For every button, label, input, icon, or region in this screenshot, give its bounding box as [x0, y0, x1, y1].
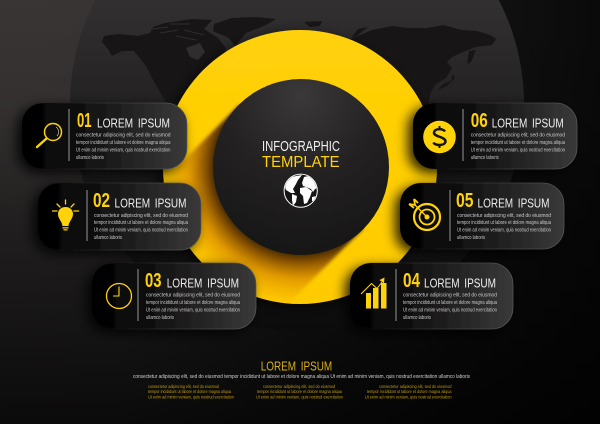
panel: 05	[400, 183, 564, 249]
panel: 05: ullamco laboris	[457, 235, 485, 241]
world map silhouette	[102, 17, 496, 115]
panel: 04: 04	[403, 270, 421, 292]
panel: 01	[22, 103, 187, 169]
panel: 02: Ut enim ad minim veniam, quis nostrud exercitation	[94, 227, 188, 233]
panel: 04: tempor incididunt ut labore et dolore magna aliqua	[403, 300, 497, 306]
panel: 01: consectetur adipiscing elit, sed do eiusmod	[76, 133, 171, 139]
panel: 06: Ut enim ad minim veniam, quis nostrud exercitation	[471, 147, 565, 153]
footer summary line: consectetur adipiscing elit, sed do eiusmod tempor incididunt ut labore et dolore magna aliqua Ut enim ad minim veniam, quis nostrud exercitation ullamco laboris	[133, 374, 470, 380]
panel: 05: consectetur adipiscing elit, sed do eiusmod	[457, 213, 551, 219]
icon: clock	[106, 284, 132, 308]
icon: dollar coin	[423, 121, 456, 153]
footer column 2	[256, 384, 343, 400]
panel: 04: LOREM IPSUM	[424, 275, 496, 290]
panel: 06: consectetur adipiscing elit, sed do eiusmod	[471, 133, 565, 139]
panel: 01: tempor incididunt ut labore et dolore magna aliqua	[76, 140, 171, 146]
footer column 3: consectetur adipiscing elit, sed do eiusmod	[379, 384, 452, 389]
panel: 05: tempor incididunt ut labore et dolore magna aliqua	[457, 220, 551, 226]
icon: magnifier	[37, 124, 62, 147]
panel: 05: 05	[456, 190, 474, 212]
footer column 2: Ut enim ad minim veniam, quis nostrud exercitation	[256, 394, 343, 400]
panel: 04: consectetur adipiscing elit, sed do eiusmod	[403, 293, 497, 299]
footer column 1: consectetur adipiscing elit, sed do eiusmod	[148, 384, 219, 389]
panel: 04	[350, 263, 513, 329]
panel: 01: LOREM IPSUM	[97, 115, 170, 130]
footer column 3: Ut enim ad minim veniam, quis nostrud exercitation	[365, 394, 452, 400]
panel: 02: ullamco laboris	[94, 235, 122, 241]
panel: 01: ullamco laboris	[76, 155, 104, 161]
panel: 01: Ut enim ad minim veniam, quis nostrud exercitation	[76, 147, 171, 153]
footer column 1: Ut enim ad minim veniam, quis nostrud exercitation	[148, 394, 234, 400]
icon: white globe	[284, 174, 320, 207]
panel: 06: 06	[471, 110, 488, 132]
panel: 02	[38, 183, 201, 250]
center title: INFOGRAPHIC	[262, 139, 340, 155]
center title	[262, 139, 340, 171]
panel: 03	[92, 263, 256, 329]
panel: 02: consectetur adipiscing elit, sed do eiusmod	[94, 213, 188, 219]
center title: TEMPLATE	[262, 154, 340, 171]
footer column 2: consectetur adipiscing elit, sed do eiusmod	[263, 384, 335, 389]
icon: target with arrow	[409, 199, 440, 230]
panel: 06: tempor incididunt ut labore et dolore magna aliqua	[471, 140, 565, 146]
panel: 02: tempor incididunt ut labore et dolore magna aliqua	[94, 220, 188, 226]
center disc	[213, 79, 389, 255]
world globe backdrop	[70, 0, 524, 331]
long diagonal shadow on ring	[169, 103, 365, 303]
panel: 03: ullamco laboris	[146, 315, 174, 321]
panel: 05: Ut enim ad minim veniam, quis nostrud exercitation	[457, 227, 551, 233]
panel: 03: 03	[145, 270, 162, 292]
icon: light bulb	[52, 200, 78, 231]
footer column 1: tempor incididunt ut labore et dolore magna aliqua	[148, 389, 231, 394]
icon: bar chart with arrow	[361, 278, 386, 308]
footer column 1	[148, 384, 234, 400]
panel: 06	[413, 103, 577, 169]
footer heading: LOREM IPSUM	[261, 358, 332, 374]
panel: 02: 02	[93, 190, 110, 212]
panel: 05: LOREM IPSUM	[478, 196, 550, 211]
footer column 2: tempor incididunt ut labore et dolore magna aliqua	[257, 389, 342, 394]
yellow ring	[160, 30, 437, 304]
panel: 02: LOREM IPSUM	[114, 196, 186, 211]
panel: 03: consectetur adipiscing elit, sed do eiusmod	[146, 293, 240, 299]
panel: 01: 01	[77, 110, 92, 132]
panel: 06: LOREM IPSUM	[492, 115, 564, 130]
panel: 03: tempor incididunt ut labore et dolore magna aliqua	[146, 300, 240, 306]
panel: 03: LOREM IPSUM	[167, 275, 239, 290]
footer column 3: tempor incididunt ut labore et dolore magna aliqua	[367, 389, 452, 394]
panel: 04: ullamco laboris	[403, 315, 431, 321]
panel: 04: Ut enim ad minim veniam, quis nostrud exercitation	[403, 307, 497, 313]
panel: 06: ullamco laboris	[471, 155, 499, 161]
panel: 03: Ut enim ad minim veniam, quis nostrud exercitation	[146, 307, 240, 313]
footer column 3	[365, 384, 452, 400]
